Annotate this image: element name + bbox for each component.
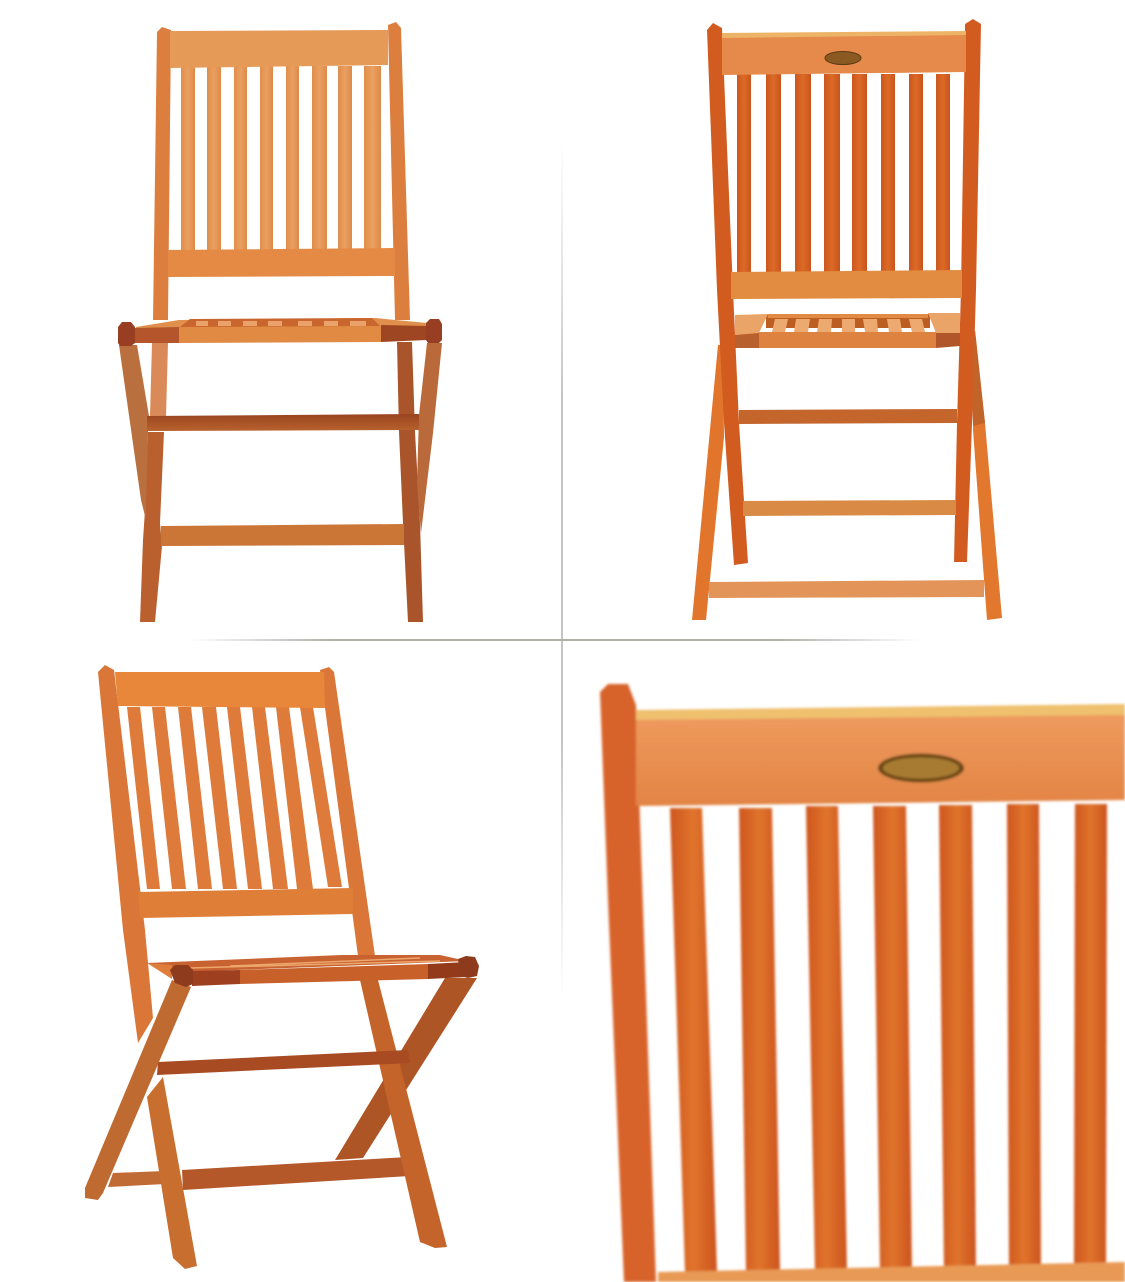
- right front leg: [360, 980, 447, 1248]
- back slats: [181, 66, 381, 250]
- chair 2: back view: [692, 19, 1002, 620]
- bottom bar: [709, 580, 984, 598]
- seat end caps: [170, 956, 479, 987]
- upper bar: [157, 1050, 410, 1075]
- top rail: [636, 715, 1125, 806]
- top rail edge: [636, 704, 1125, 722]
- right front leg shaded top: [970, 330, 985, 426]
- lower bar rear part: [108, 1171, 165, 1187]
- back slats: [127, 707, 342, 889]
- bottom rail: [658, 1262, 1125, 1282]
- left crossed legs lower: [140, 432, 164, 622]
- vertical divider: [561, 140, 563, 1000]
- back posts: [153, 22, 410, 320]
- right rear leg: [397, 342, 423, 622]
- near diagonal leg: [85, 980, 191, 1200]
- back posts: [707, 19, 981, 565]
- back posts: [98, 665, 375, 1043]
- middle rail: [731, 270, 962, 299]
- back post: [600, 684, 656, 1282]
- seat: [135, 318, 427, 343]
- brass name plate: [825, 52, 861, 64]
- middle rail: [138, 888, 353, 918]
- back slats: [737, 74, 950, 272]
- top rail edge: [722, 31, 966, 39]
- middle bar: [743, 500, 956, 516]
- lower bar: [182, 1157, 410, 1190]
- left outer leg: [119, 345, 149, 520]
- brass name plate: [878, 754, 964, 782]
- far diagonal leg: [335, 978, 477, 1160]
- upper bar: [739, 409, 957, 424]
- slats: [670, 804, 1107, 1272]
- top rail: [722, 35, 966, 75]
- lower cross bar: [161, 524, 404, 546]
- top rail: [170, 30, 388, 68]
- upper cross bar: [147, 414, 419, 431]
- chair 1: front view: [118, 22, 442, 622]
- middle rail: [168, 248, 395, 277]
- seat end caps: [118, 319, 442, 346]
- left rear lower leg: [147, 1077, 197, 1269]
- chair 3: three-quarter view: [85, 665, 479, 1269]
- seat: [147, 955, 467, 986]
- panel: close-up of back rest: [600, 684, 1125, 1282]
- left rear leg upper: [150, 343, 168, 416]
- horizontal divider: [190, 639, 920, 641]
- left front leg: [692, 345, 724, 620]
- right outer leg: [417, 343, 442, 533]
- top rail: [115, 672, 325, 708]
- right front leg: [973, 330, 1002, 620]
- seat: [735, 313, 960, 348]
